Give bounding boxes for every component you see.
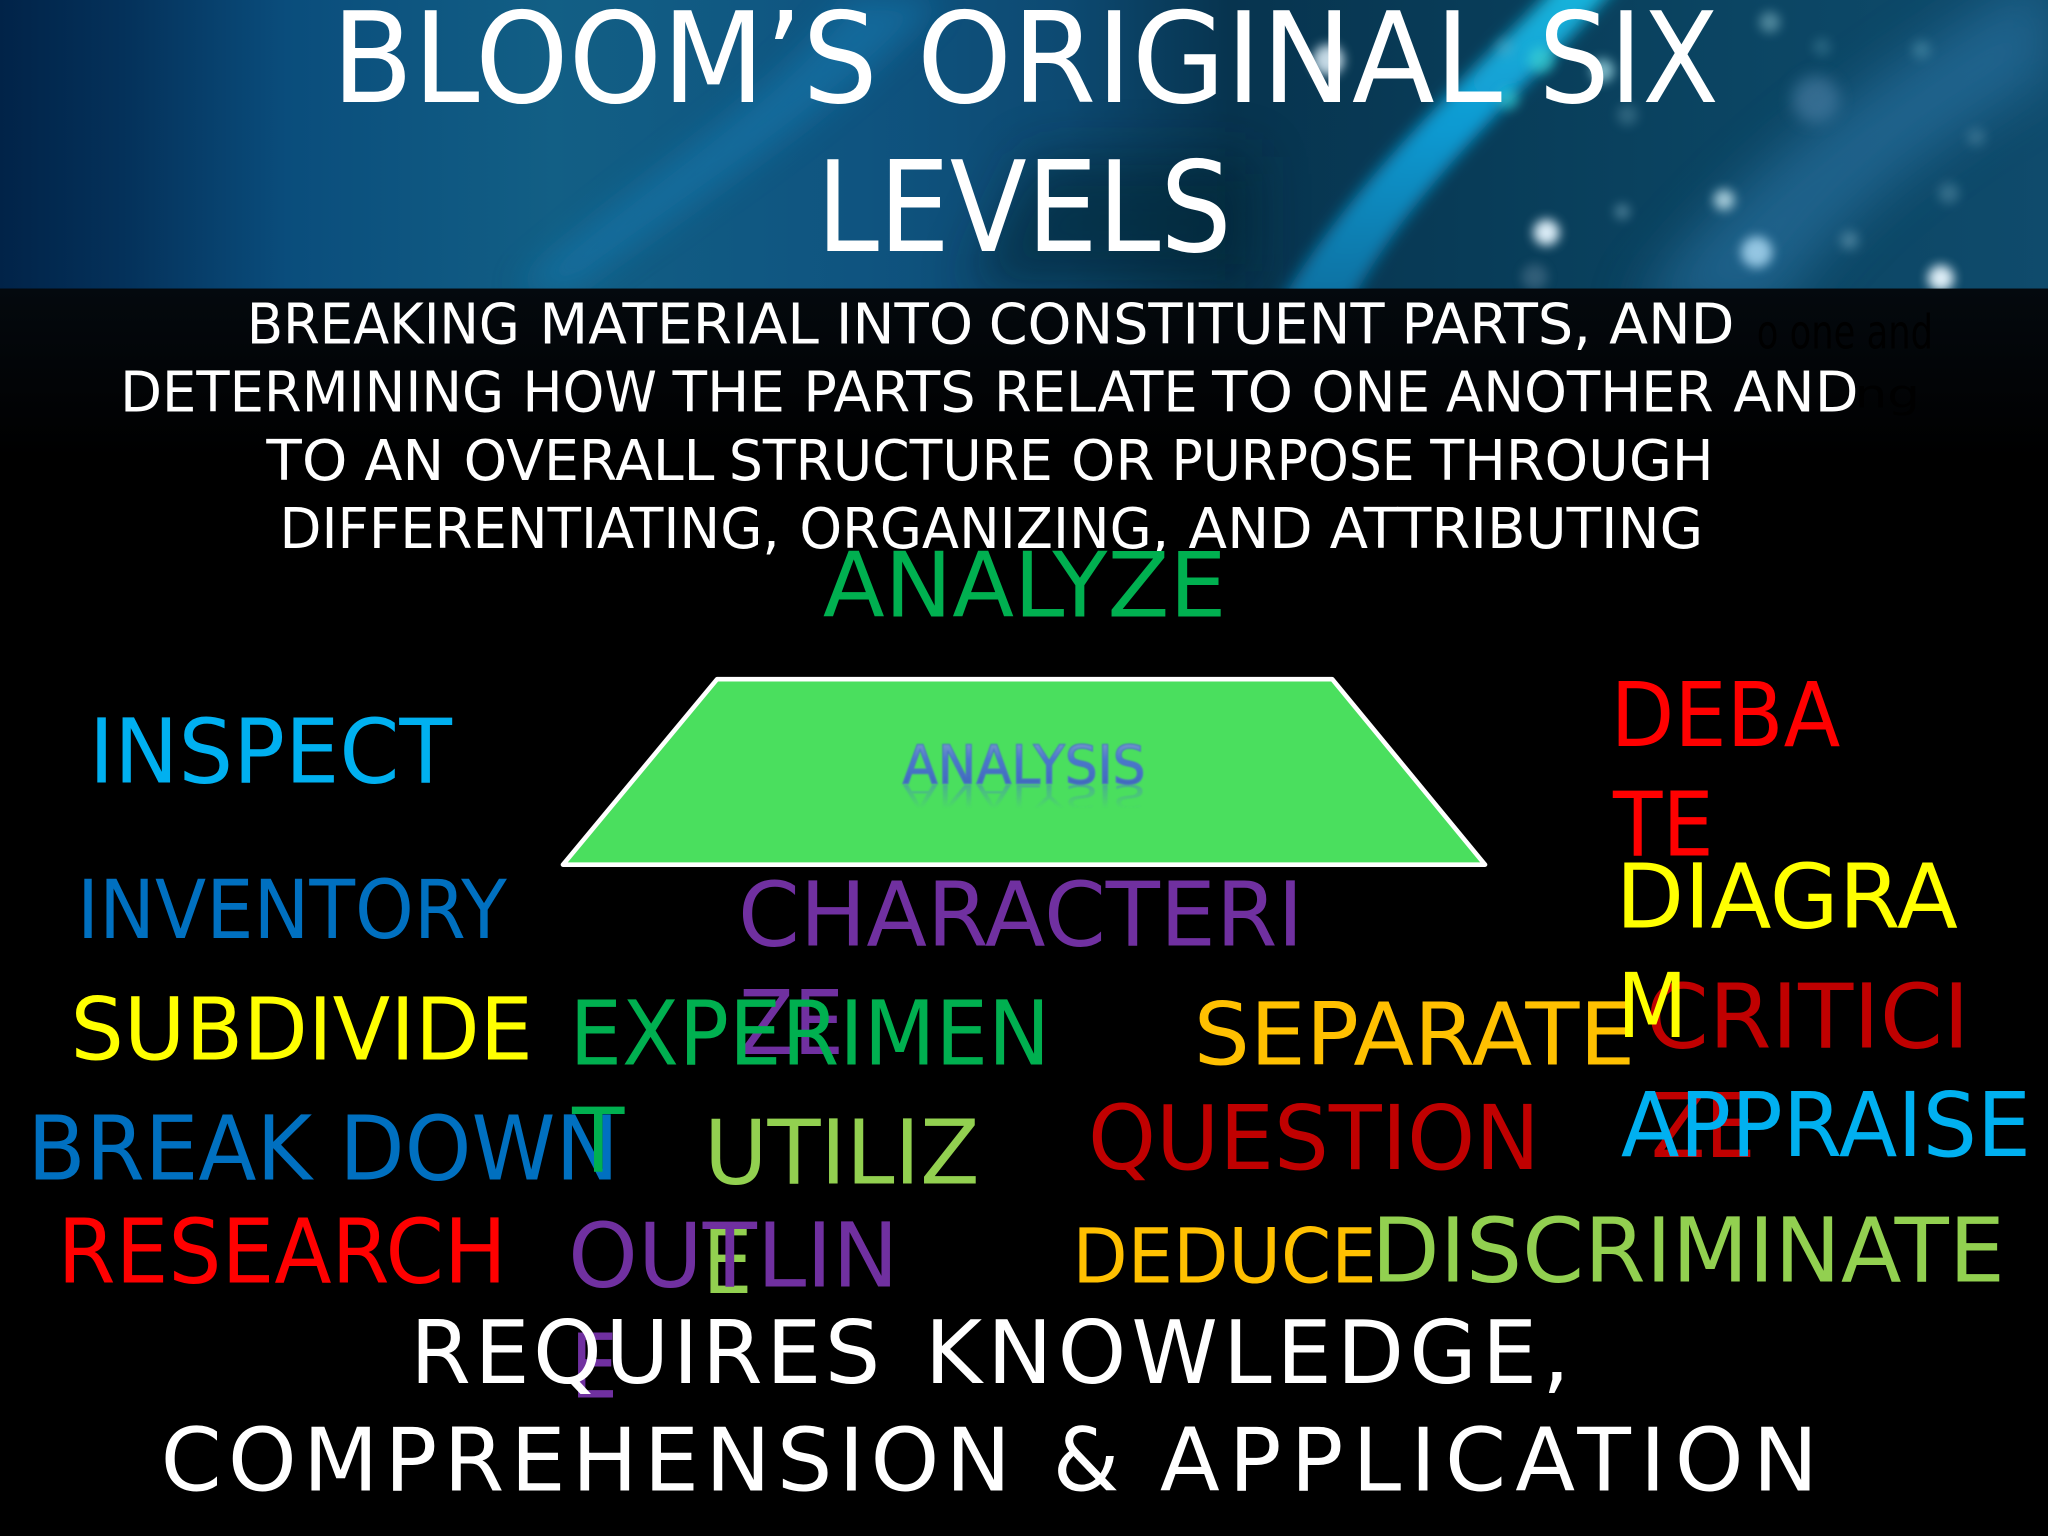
- description text: CONSTITUENT: [989, 293, 1385, 358]
- description text: INTO: [836, 293, 973, 358]
- ghost text behind description: [1757, 306, 1933, 418]
- description text: THE: [672, 360, 785, 425]
- description text: BREAKING: [247, 293, 520, 358]
- description text: AN: [364, 429, 444, 494]
- heading: analyze: ANALYZE: [823, 533, 1226, 638]
- analysis label: ANALYSIS: [903, 734, 1145, 797]
- description text: PARTS: [803, 360, 976, 425]
- word: discriminate: DISCRIMINATE: [1371, 1199, 2005, 1302]
- word: separate: SEPARATE: [1194, 985, 1635, 1085]
- word: experiment: T: [571, 1090, 625, 1193]
- word: debate: TE: [1612, 774, 1714, 877]
- description text: ORGANIZING,: [799, 497, 1169, 562]
- description text: ONE: [1311, 360, 1430, 425]
- footer: prerequisites: REQUIRES: [410, 1302, 880, 1404]
- title: LEVELS: [816, 135, 1232, 281]
- word: utilize: [703, 1101, 980, 1314]
- description text: AND: [1189, 497, 1313, 562]
- description text: STRUCTURE: [729, 429, 1053, 494]
- description text: PURPOSE: [1172, 429, 1415, 494]
- description text: OR: [1071, 429, 1155, 494]
- description text: OVERALL: [464, 429, 714, 494]
- word: outline: [568, 1205, 899, 1419]
- pyramid level: analysis trapezoid: [563, 679, 1485, 865]
- footer: prerequisites: KNOWLEDGE,: [925, 1302, 1570, 1404]
- word: break down: BREAK DOWN: [27, 1097, 619, 1200]
- description text: HOW: [522, 360, 657, 425]
- word: outline: E: [571, 1316, 618, 1419]
- description text: DETERMINING: [120, 360, 504, 425]
- footer: prerequisites: [161, 1302, 1818, 1511]
- word: diagram: DIAGRA: [1616, 845, 1958, 948]
- description text: [120, 293, 1859, 562]
- word: utilize: E: [703, 1211, 752, 1314]
- word: inventory: INVENTORY: [77, 864, 507, 958]
- description text: MATERIAL: [539, 293, 819, 358]
- description text: ATTRIBUTING: [1330, 497, 1703, 562]
- description text: DIFFERENTIATING,: [280, 497, 780, 562]
- word: experiment: [569, 982, 1050, 1193]
- word: criticize: CRITICI: [1646, 966, 1970, 1069]
- ghost text behind description: ng: [1855, 373, 1920, 418]
- word: criticize: [1646, 966, 1970, 1178]
- footer: prerequisites: COMPREHENSION: [161, 1409, 1011, 1511]
- word: diagram: [1616, 845, 1958, 1058]
- ghost text behind description: o one and: [1757, 306, 1933, 361]
- description text: RELATE: [994, 360, 1198, 425]
- description text: TO: [1211, 360, 1293, 425]
- description text: TO: [265, 429, 347, 494]
- description text: PARTS,: [1401, 293, 1591, 358]
- word: subdivide: SUBDIVIDE: [71, 980, 533, 1080]
- analysis label reflection: ANALYSIS: [903, 777, 1145, 814]
- word: characterize: [738, 864, 1304, 1075]
- word: utilize: UTILIZ: [704, 1101, 980, 1204]
- word: debate: [1610, 664, 1840, 877]
- footer: prerequisites: &: [1053, 1409, 1119, 1511]
- description text: ANOTHER: [1446, 360, 1714, 425]
- word: inspect: INSPECT: [89, 700, 453, 803]
- word: characterize: CHARACTERI: [738, 864, 1304, 967]
- header band: blue starfield: [0, 0, 2048, 313]
- word: question: QUESTION: [1088, 1087, 1540, 1190]
- word: deduce: DEDUCE: [1072, 1213, 1377, 1301]
- word: characterize: ZE: [739, 972, 844, 1075]
- description text: AND: [1733, 360, 1859, 425]
- word: outline: OUTLIN: [568, 1205, 899, 1308]
- word: experiment: EXPERIMEN: [569, 982, 1050, 1085]
- word: appraise: APPRAISE: [1621, 1074, 2031, 1177]
- description text: THROUGH: [1429, 429, 1714, 494]
- word: diagram: M: [1617, 955, 1688, 1058]
- word: research: RESEARCH: [57, 1201, 507, 1304]
- word: criticize: ZE: [1651, 1075, 1755, 1178]
- title: [332, 0, 1719, 281]
- description text: AND: [1609, 293, 1735, 358]
- word: debate: DEBA: [1610, 664, 1840, 767]
- footer: prerequisites: APPLICATION: [1160, 1409, 1818, 1511]
